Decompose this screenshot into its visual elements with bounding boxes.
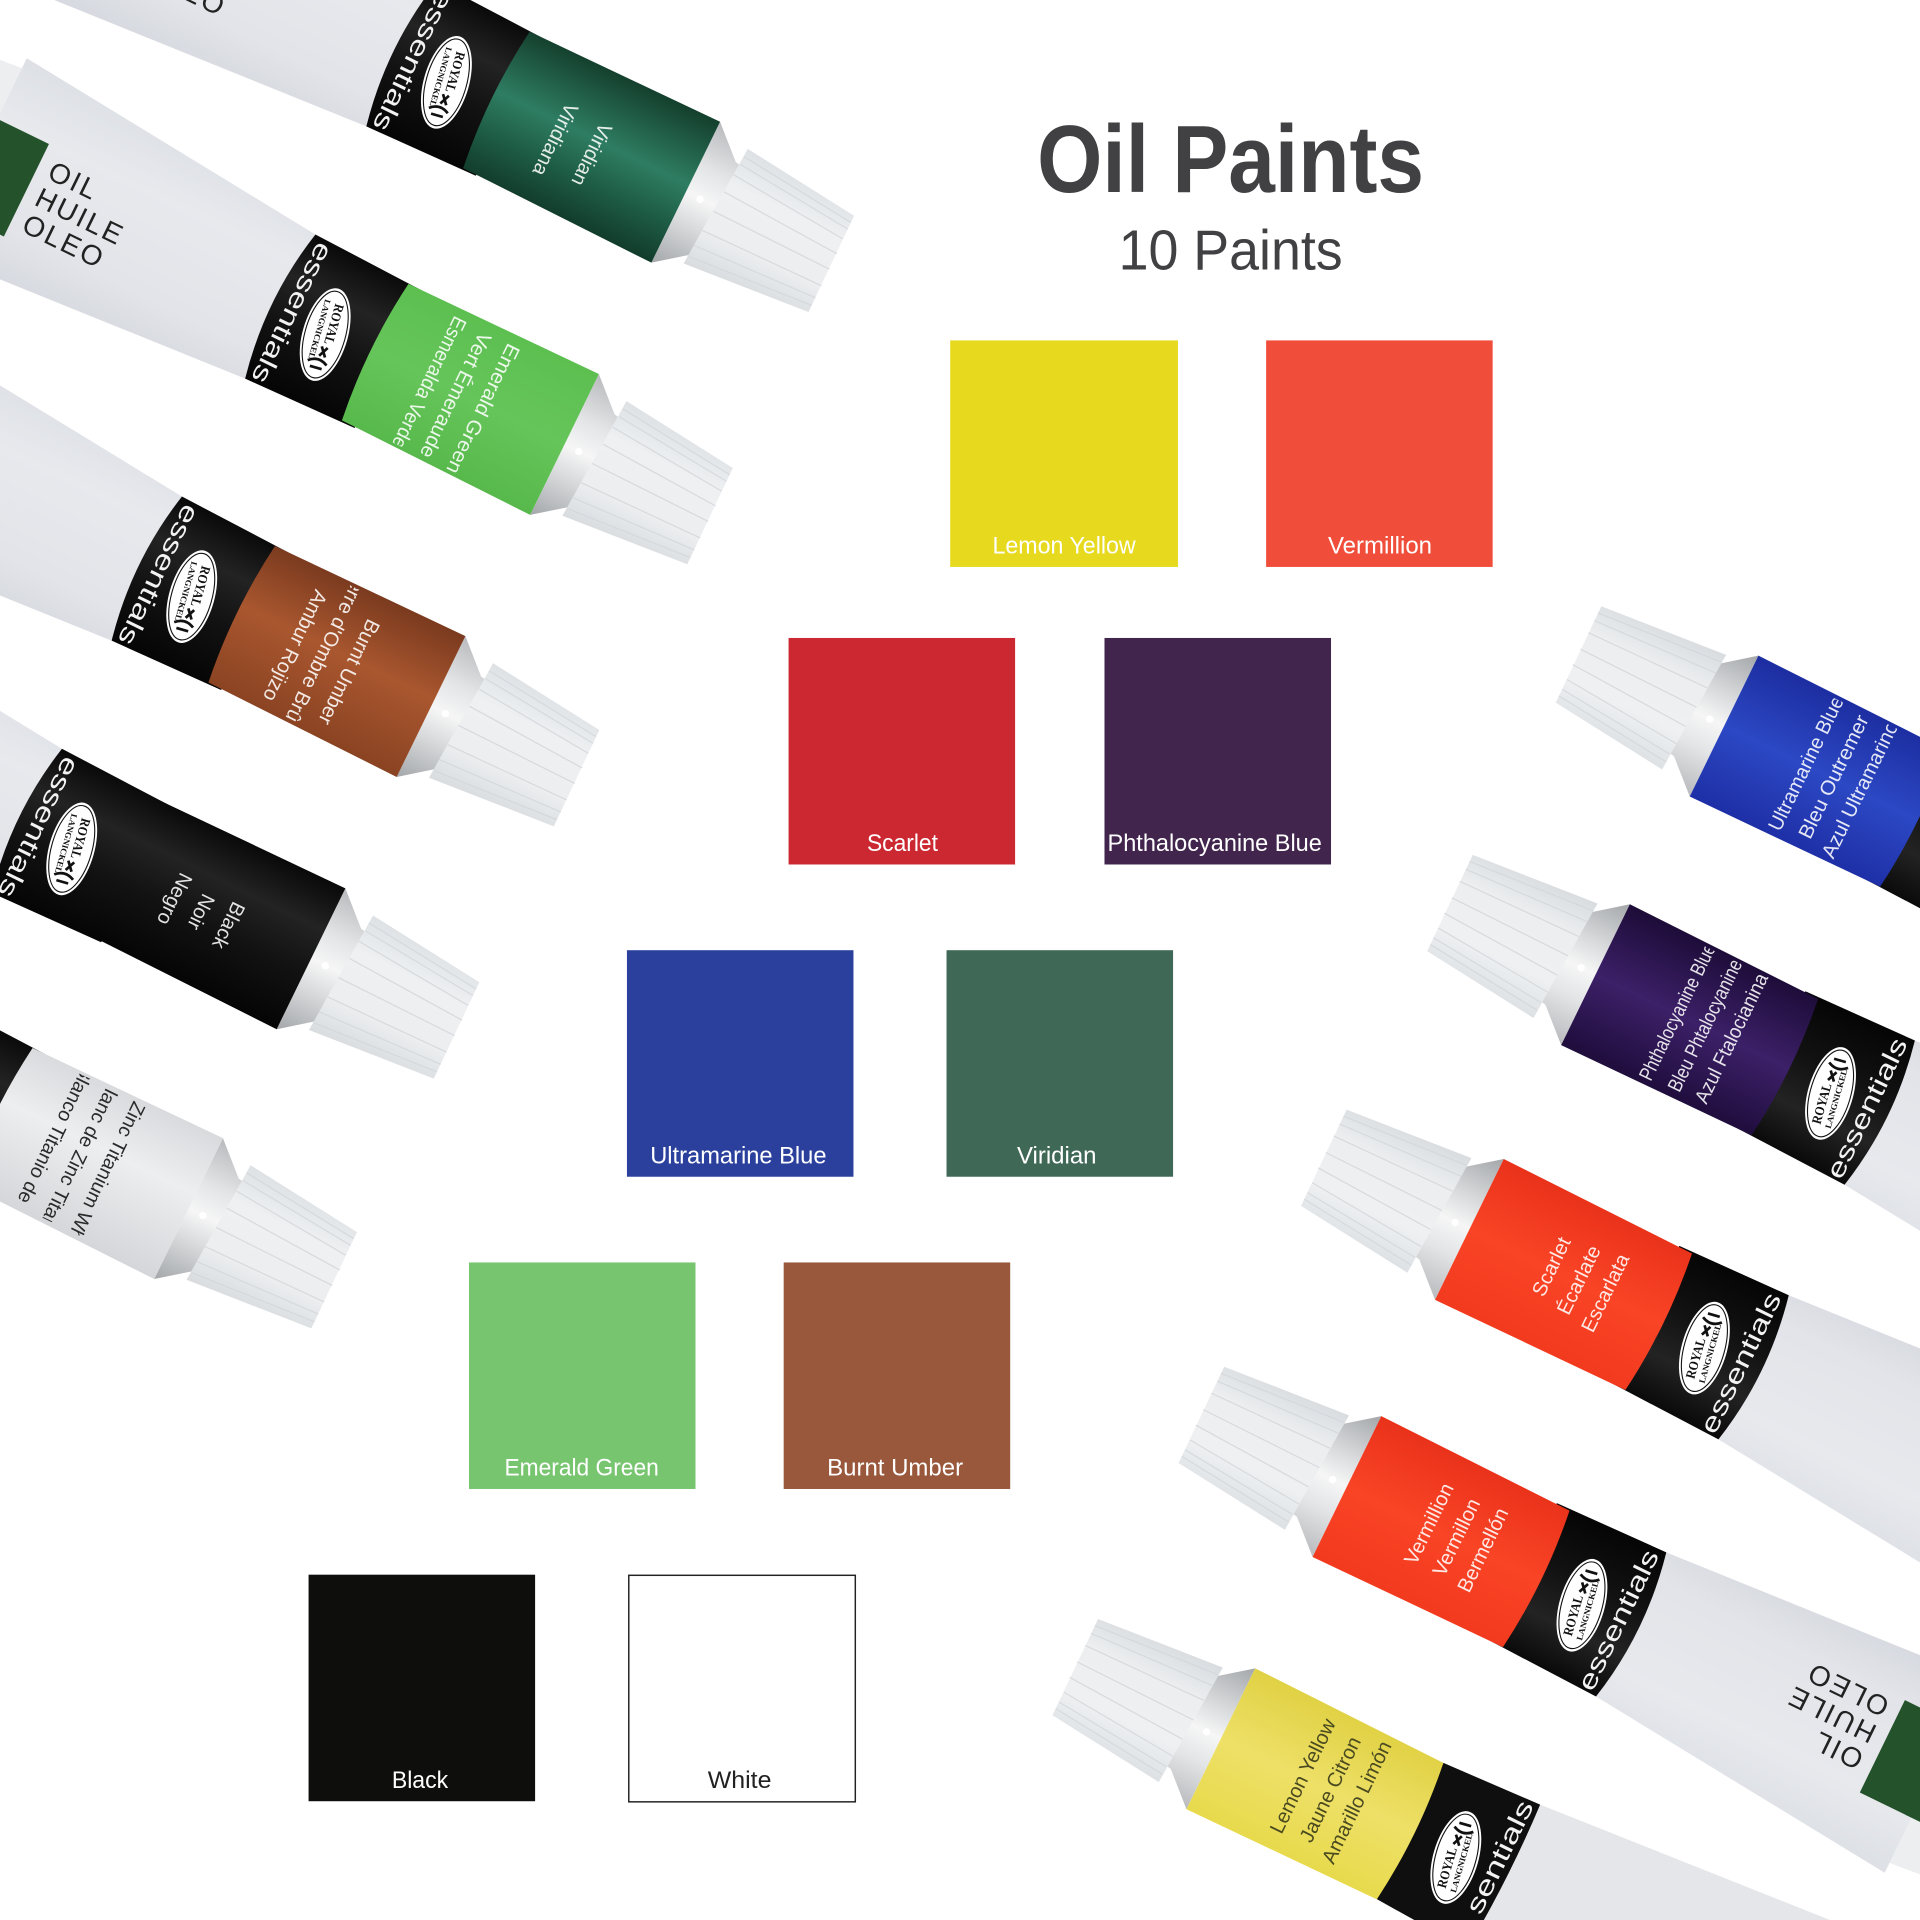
tube: Vermillion: Vermillion <box>1400 1480 1459 1568</box>
tube: Black: Negro <box>152 869 196 928</box>
tube: Burnt Umber: Burnt Umber <box>313 615 383 728</box>
title: Oil Paints <box>1037 107 1424 213</box>
tube: Emerald Green: OLEO <box>18 208 110 275</box>
tube: Phthalocyanine Blue: Bleu Phtalocyanine <box>1664 956 1747 1095</box>
swatch: Burnt Umber: Burnt Umber <box>827 1455 963 1482</box>
tube: Vermillion <box>1178 1366 1920 1874</box>
swatch: Burnt Umber <box>784 1262 1010 1489</box>
tube: Emerald Green: Esmeralda Verde <box>387 312 470 452</box>
tube: Lemon Yellow: LANGNICKEL <box>1448 1832 1475 1894</box>
swatch: Scarlet: Scarlet <box>867 830 938 857</box>
tube: Ultramarine Blue <box>1556 606 1920 908</box>
swatch: Ultramarine Blue: Ultramarine Blue <box>650 1142 827 1169</box>
tube: Black: Noir <box>182 890 218 933</box>
tube: Phthalocyanine Blue: Phthalocyanine Blue <box>1636 940 1721 1084</box>
tube: Zinc Titanium White: Zinc Titanium White <box>54 1098 149 1262</box>
tube: Viridian: Viridian <box>566 119 616 189</box>
tube: Emerald Green: Vert Émeraude <box>415 329 496 462</box>
tube: Burnt Umber: LANGNICKEL <box>173 560 199 622</box>
tube: Viridian: ROYAL <box>442 50 468 94</box>
tube: Vermillion: OIL <box>1807 1725 1868 1776</box>
tube: Lemon Yellow: Amarillo Limón <box>1318 1738 1397 1867</box>
tube: Scarlet: ROYAL <box>1683 1336 1708 1380</box>
tube: Scarlet: essentials <box>1695 1288 1787 1438</box>
tube: Emerald Green <box>0 58 733 564</box>
tube: Burnt Umber: essentials <box>112 500 204 650</box>
tube: Black <box>0 711 480 1078</box>
swatch: Lemon Yellow: Lemon Yellow <box>992 532 1136 559</box>
tube: Ultramarine Blue: Bleu Outremer <box>1795 712 1874 842</box>
tube: Scarlet: LANGNICKEL <box>1697 1322 1723 1384</box>
swatch: Phthalocyanine Blue: Phthalocyanine Blue <box>1108 830 1322 857</box>
tube: Black: Black <box>207 898 249 953</box>
tube: Vermillion: Bermellón <box>1454 1505 1513 1596</box>
swatch: Emerald Green: Emerald Green <box>504 1455 659 1482</box>
tube: Emerald Green: essentials <box>245 238 338 388</box>
tube: Phthalocyanine Blue: LANGNICKEL <box>1823 1068 1849 1130</box>
tube: Burnt Umber <box>0 386 600 826</box>
swatch: Black <box>309 1575 535 1801</box>
tube: Viridian <box>54 0 854 312</box>
swatch: White <box>629 1575 855 1802</box>
tube: Lemon Yellow: sentials <box>1461 1796 1540 1918</box>
tube: Viridian: LANGNICKEL <box>428 46 454 108</box>
tube: Emerald Green: Emerald Green <box>441 340 523 477</box>
swatch: Black: Black <box>392 1767 449 1794</box>
tube: Phthalocyanine Blue: Azul Ftalocianina <box>1691 969 1773 1107</box>
tube: Phthalocyanine Blue <box>1427 855 1920 1230</box>
tube: Lemon Yellow: Jaune Citron <box>1296 1734 1366 1846</box>
tube: Ultramarine Blue: Ultramarine Blue <box>1765 693 1849 835</box>
tube: Zinc Titanium White: Blanc de Zinc Titane <box>29 1074 127 1243</box>
tube: Emerald Green: HUILE <box>30 182 130 252</box>
swatch: Viridian: Viridian <box>1017 1142 1097 1169</box>
tube: Vermillion: LANGNICKEL <box>1574 1580 1601 1641</box>
tube: Burnt Umber: Terre d'Ombre Brûlée <box>269 567 373 750</box>
tube: Phthalocyanine Blue: essentials <box>1821 1034 1913 1184</box>
tube: Lemon Yellow: ROYAL <box>1434 1846 1460 1890</box>
tube: Vermillion: HUILE <box>1782 1680 1881 1749</box>
tube: Vermillion: essentials <box>1573 1546 1665 1695</box>
tube: Lemon Yellow: Lemon Yellow <box>1266 1715 1341 1837</box>
swatch: Vermillion: Vermillion <box>1328 532 1432 559</box>
tube: Black: essentials <box>0 752 84 902</box>
tube: Black: LANGNICKEL <box>53 813 79 875</box>
tube: Scarlet: Écarlate <box>1553 1242 1606 1318</box>
swatch: Ultramarine Blue <box>627 950 853 1177</box>
subtitle: 10 Paints <box>1119 218 1343 281</box>
tube: Lemon Yellow <box>1040 1597 1830 1920</box>
tube: Scarlet: Scarlet <box>1528 1234 1576 1300</box>
swatch: Scarlet <box>789 638 1015 864</box>
tube: Emerald Green: LANGNICKEL <box>306 298 333 360</box>
tube: Burnt Umber: ROYAL <box>188 564 214 609</box>
swatch: Emerald Green <box>469 1262 696 1489</box>
tube: Vermillion: ROYAL <box>1560 1593 1586 1638</box>
tube: Emerald Green: OIL <box>43 156 104 206</box>
swatch: Lemon Yellow <box>950 340 1178 567</box>
swatch: Vermillion <box>1266 340 1493 567</box>
tube: Emerald Green: ROYAL <box>321 302 347 346</box>
tube: Ultramarine Blue: Azul Ultramarino <box>1818 718 1903 862</box>
tube: Vermillion: Vermillon <box>1429 1495 1485 1580</box>
tube: Black: ROYAL <box>68 817 94 861</box>
tube: Burnt Umber: Ambur Rojizo <box>258 586 331 705</box>
tube: Scarlet <box>1301 1110 1920 1562</box>
tube: Phthalocyanine Blue: ROYAL <box>1809 1082 1835 1126</box>
tube: Viridian: Viridiana <box>527 99 582 180</box>
swatch: White: White <box>708 1767 771 1794</box>
tube: Zinc Titanium White <box>0 1030 357 1328</box>
tube: Vermillion: OLEO <box>1801 1656 1894 1723</box>
swatch: Viridian <box>947 950 1173 1177</box>
swatch: Phthalocyanine Blue <box>1104 638 1331 864</box>
tube: Scarlet: Escarlata <box>1578 1250 1635 1336</box>
